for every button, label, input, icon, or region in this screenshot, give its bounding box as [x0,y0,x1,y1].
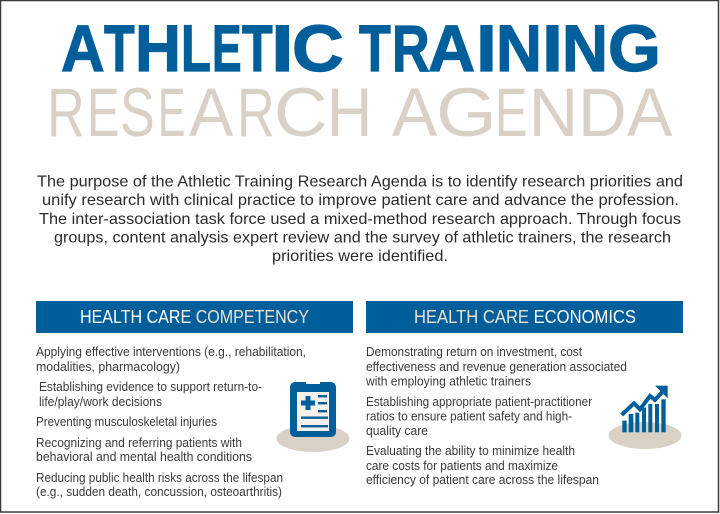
title: Athletic Training: A [428,11,475,85]
subtitle: Research Agenda [47,74,672,151]
text list: economics priorities: Demonstrating return on investment, cost [366,344,582,359]
intro paragraph: The purpose of the Athletic Training Research Agenda is to identify research priorities and [37,174,683,190]
intro paragraph: unify research with clinical practice to improve patient care and advance the profession. [42,192,679,209]
title: Athletic Training: I [542,11,563,85]
text list: economics priorities: quality care [366,423,428,438]
text list: competency priorities: Establishing evidence to support return-to- [39,379,262,394]
text list: competency priorities: modalities, pharmacology) [36,359,180,374]
text list: economics priorities: with employing athletic trainers [365,374,531,388]
heading: health care economics [366,301,683,333]
text list: competency priorities: (e.g., sudden death, concussion, osteoarthritis) [36,484,282,499]
subtitle: Research Agenda: E [87,74,120,151]
title: Athletic Training: R [392,11,429,85]
title: Athletic Training: C [292,11,344,85]
title: Athletic Training: T [359,11,391,85]
subtitle: Research Agenda: E [495,74,528,151]
heading: health care competency [36,301,353,333]
text list: competency priorities: Reducing public health risks across the lifespan [36,470,283,485]
title: Athletic Training: H [135,11,181,85]
icon: clipboard [276,381,350,452]
text list: economics priorities: Evaluating the ability to minimize health [366,443,575,458]
subtitle: Research Agenda: R [47,74,84,151]
subtitle: Research Agenda: S [120,74,154,151]
subtitle: Research Agenda: E [158,74,186,151]
subtitle: Research Agenda: R [237,74,274,151]
icon: rising bar chart [608,386,682,449]
subtitle: Research Agenda: A [627,74,672,151]
text list: economics priorities: Establishing appropriate patient-practitioner [366,394,593,409]
title: Athletic Training: E [212,11,242,85]
subtitle: Research Agenda: A [189,74,233,151]
intro paragraph: priorities were identified. [272,248,448,265]
title: Athletic Training: L [181,11,211,85]
text list: economics priorities [365,344,627,487]
title: Athletic Training: G [608,11,661,85]
text list: competency priorities: behavioral and mental health conditions [36,449,252,464]
panel: health care competency [36,301,353,499]
title: Athletic Training [61,11,661,85]
subtitle: Research Agenda: G [436,74,497,151]
title: Athletic Training: I [476,11,497,85]
title: Athletic Training: T [242,11,273,85]
title: Athletic Training: A [61,11,104,85]
intro paragraph: groups, content analysis expert review and the survey of athletic trainers, the research [54,230,671,246]
subtitle: Research Agenda: A [392,74,437,151]
text list: economics priorities: ratios to ensure patient safety and high- [366,408,572,424]
text list: competency priorities: Applying effective interventions (e.g., rehabilitation, [36,344,306,359]
subtitle: Research Agenda: C [274,74,328,151]
text list: economics priorities: efficiency of patient care across the lifespan [366,472,599,487]
subtitle: Research Agenda: N [529,74,578,151]
subtitle: Research Agenda: H [327,74,372,151]
title: Athletic Training: N [562,11,608,85]
text list: competency priorities: Preventing musculoskeletal injuries [36,414,217,429]
heading: health care economics: HEALTH CARE ECONOMICS [414,306,636,327]
title: Athletic Training: N [496,11,542,85]
text list: economics priorities: effectiveness and revenue generation associated [366,359,627,374]
panel: health care economics [365,301,683,487]
intro paragraph: The inter-association task force used a mixed-method research approach. Through focus [39,211,681,228]
text list: competency priorities [36,344,306,499]
heading: health care competency: HEALTH CARE COMPETENCY [80,306,309,327]
title: Athletic Training: I [271,11,294,85]
text list: competency priorities: Recognizing and referring patients with [36,435,242,450]
title: Athletic Training: T [104,11,135,85]
subtitle: Research Agenda: D [578,74,626,151]
intro paragraph [37,174,683,265]
text list: competency priorities: life/play/work decisions [39,394,162,409]
text list: economics priorities: care costs for patients and maximize [366,458,558,473]
